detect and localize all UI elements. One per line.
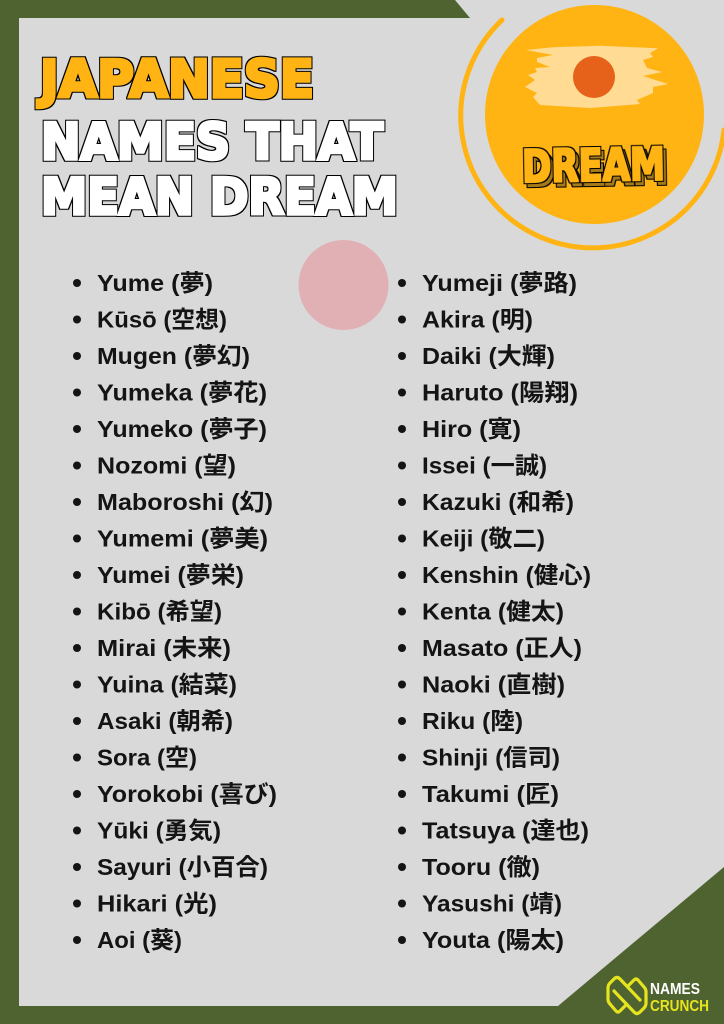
names: Daiki (大輝) <box>422 343 555 369</box>
names: Keiji (敬二) <box>422 526 545 552</box>
names: Yorokobi (喜び) <box>97 781 277 807</box>
names: Sayuri (小百合) <box>97 854 268 880</box>
names: Yuina (結菜) <box>97 672 237 698</box>
names <box>422 270 591 953</box>
names: Masato (正人) <box>422 635 582 661</box>
names: Nozomi (望) <box>97 452 236 478</box>
names: Hikari (光) <box>97 890 217 916</box>
title <box>37 50 398 226</box>
icon: red sun <box>573 56 615 98</box>
badge: dream emblem <box>461 5 724 248</box>
orange disc <box>485 5 704 224</box>
names: Naoki (直樹) <box>422 672 565 698</box>
names <box>97 270 277 953</box>
names: Kibō (希望) <box>97 598 222 624</box>
names: Asaki (朝希) <box>97 708 233 734</box>
names: Takumi (匠) <box>422 781 559 807</box>
bullets <box>398 279 406 944</box>
names: Kūsō (空想) <box>97 306 227 332</box>
title line: Mean dream: MEAN DREAM <box>41 168 398 226</box>
wordmark: Names: NAMES <box>650 981 700 998</box>
names: Shinji (信司) <box>422 744 560 770</box>
names: Yumeko (夢子) <box>97 416 267 442</box>
names: Yumeka (夢花) <box>97 380 267 406</box>
names: Maboroshi (幻) <box>97 489 273 515</box>
names list: left column <box>73 270 277 953</box>
names: Yasushi (靖) <box>422 890 562 916</box>
icon: brush stroke <box>525 46 668 108</box>
names list: right column <box>398 270 591 953</box>
dream lettering: DREAM <box>522 138 665 193</box>
decorative pink circle <box>298 240 388 330</box>
title line: Japanese: JAPANESE <box>37 50 314 110</box>
names: Yumemi (夢美) <box>97 526 268 552</box>
names: Riku (陸) <box>422 708 523 734</box>
names: Kazuki (和希) <box>422 489 574 515</box>
names: Yumei (夢栄) <box>97 562 244 588</box>
names: Mirai (未来) <box>97 635 231 661</box>
names: Akira (明) <box>422 306 533 332</box>
names: Yumeji (夢路) <box>422 270 577 296</box>
title line: Names that: NAMES THAT <box>41 113 383 171</box>
names: Haruto (陽翔) <box>422 380 578 406</box>
names: Hiro (寛) <box>422 416 521 442</box>
wordmark: Crunch: CRUNCH <box>650 998 709 1015</box>
names: Tooru (徹) <box>422 854 540 880</box>
orange arc ring <box>461 20 724 248</box>
names: Sora (空) <box>97 744 197 770</box>
logo: Names Crunch <box>608 978 709 1015</box>
names: Youta (陽太) <box>422 927 564 953</box>
names: Yūki (勇気) <box>97 818 221 844</box>
bullets <box>73 279 81 944</box>
names: Issei (一誠) <box>422 452 547 478</box>
names: Kenshin (健心) <box>422 562 591 588</box>
icon: N mark <box>608 978 646 1014</box>
names: Yume (夢) <box>97 270 213 296</box>
names: Mugen (夢幻) <box>97 343 250 369</box>
names: Tatsuya (達也) <box>422 818 589 844</box>
names: Aoi (葵) <box>97 927 182 953</box>
names: Kenta (健太) <box>422 598 564 624</box>
